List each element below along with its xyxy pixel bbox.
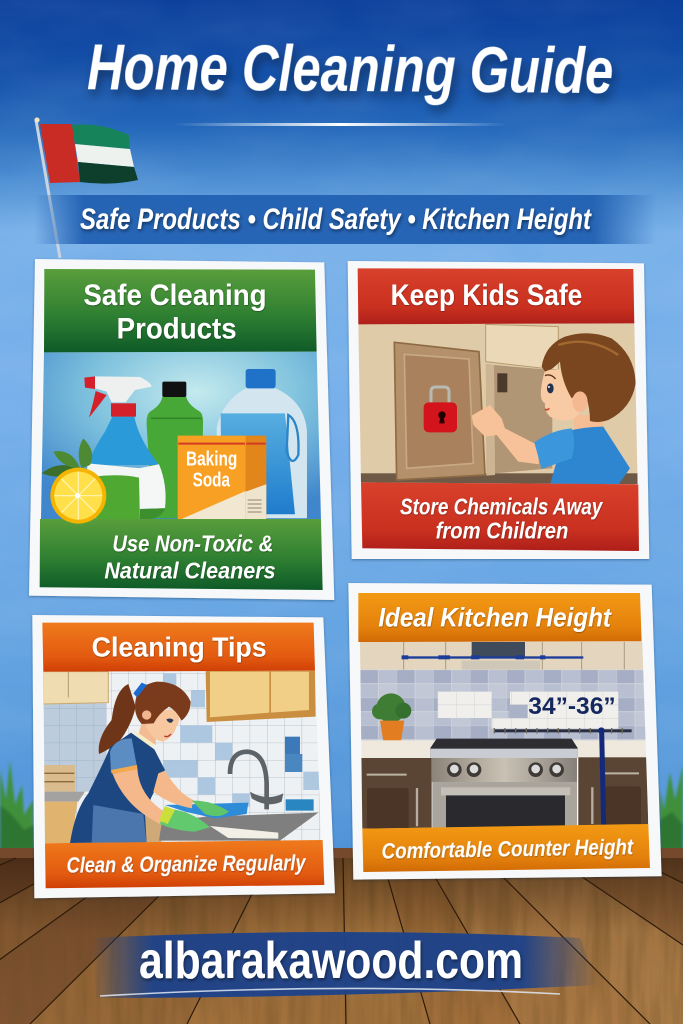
plant bbox=[372, 693, 411, 741]
blue measuring line bbox=[402, 655, 583, 659]
header bbox=[358, 593, 642, 642]
panel: cleaning tips bbox=[32, 615, 335, 898]
padlock bbox=[424, 387, 457, 432]
grass left bbox=[0, 760, 34, 850]
caption: Comfortable Counter Height bbox=[381, 834, 635, 864]
header bbox=[44, 269, 317, 352]
child and locked cabinet illustration bbox=[357, 322, 640, 485]
panel: keep kids safe bbox=[348, 261, 649, 559]
title underline bbox=[175, 123, 507, 126]
caption: Store Chemicals Away bbox=[400, 493, 603, 519]
caption: Use Non-Toxic & bbox=[112, 531, 273, 557]
child bbox=[472, 333, 636, 485]
UAE flag bbox=[34, 117, 138, 258]
header bbox=[358, 268, 634, 324]
cloth bbox=[165, 803, 248, 818]
caption: from Children bbox=[436, 517, 568, 543]
caption: Natural Cleaners bbox=[104, 557, 276, 583]
spray bottle bbox=[84, 376, 166, 520]
caption bbox=[361, 482, 639, 551]
green bottle bbox=[147, 382, 203, 518]
website footer banner: albarakawood.com bbox=[139, 932, 523, 990]
range bbox=[430, 739, 578, 829]
kitchen range illustration bbox=[358, 642, 648, 831]
caption bbox=[45, 840, 324, 888]
products illustration bbox=[38, 350, 325, 520]
baking soda box bbox=[178, 436, 266, 519]
header: Safe Cleaning bbox=[83, 279, 267, 312]
woman bbox=[70, 682, 229, 843]
woman cleaning sink illustration bbox=[42, 670, 323, 845]
header: Products bbox=[117, 312, 237, 345]
wood floor bbox=[0, 848, 683, 1024]
height label: 34”-36” bbox=[528, 693, 616, 720]
header: Keep Kids Safe bbox=[391, 279, 582, 312]
height ruler bbox=[494, 727, 632, 825]
baking soda box: Baking bbox=[186, 449, 237, 471]
panel: safe cleaning products bbox=[29, 259, 334, 600]
header bbox=[42, 623, 315, 672]
lemon and leaves bbox=[42, 438, 106, 524]
faucet bbox=[230, 752, 314, 811]
jug bbox=[217, 369, 307, 518]
grass right bbox=[660, 765, 683, 850]
panel: ideal kitchen height bbox=[348, 583, 662, 880]
header: Cleaning Tips bbox=[92, 632, 267, 663]
sink bbox=[159, 813, 318, 841]
subtitle banner bbox=[34, 195, 656, 244]
baking soda box: Soda bbox=[193, 470, 231, 492]
header: Ideal Kitchen Height bbox=[378, 602, 612, 632]
caption: Clean & Organize Regularly bbox=[66, 850, 307, 878]
caption bbox=[40, 519, 323, 590]
caption bbox=[362, 824, 650, 872]
cabinet door bbox=[394, 342, 485, 480]
